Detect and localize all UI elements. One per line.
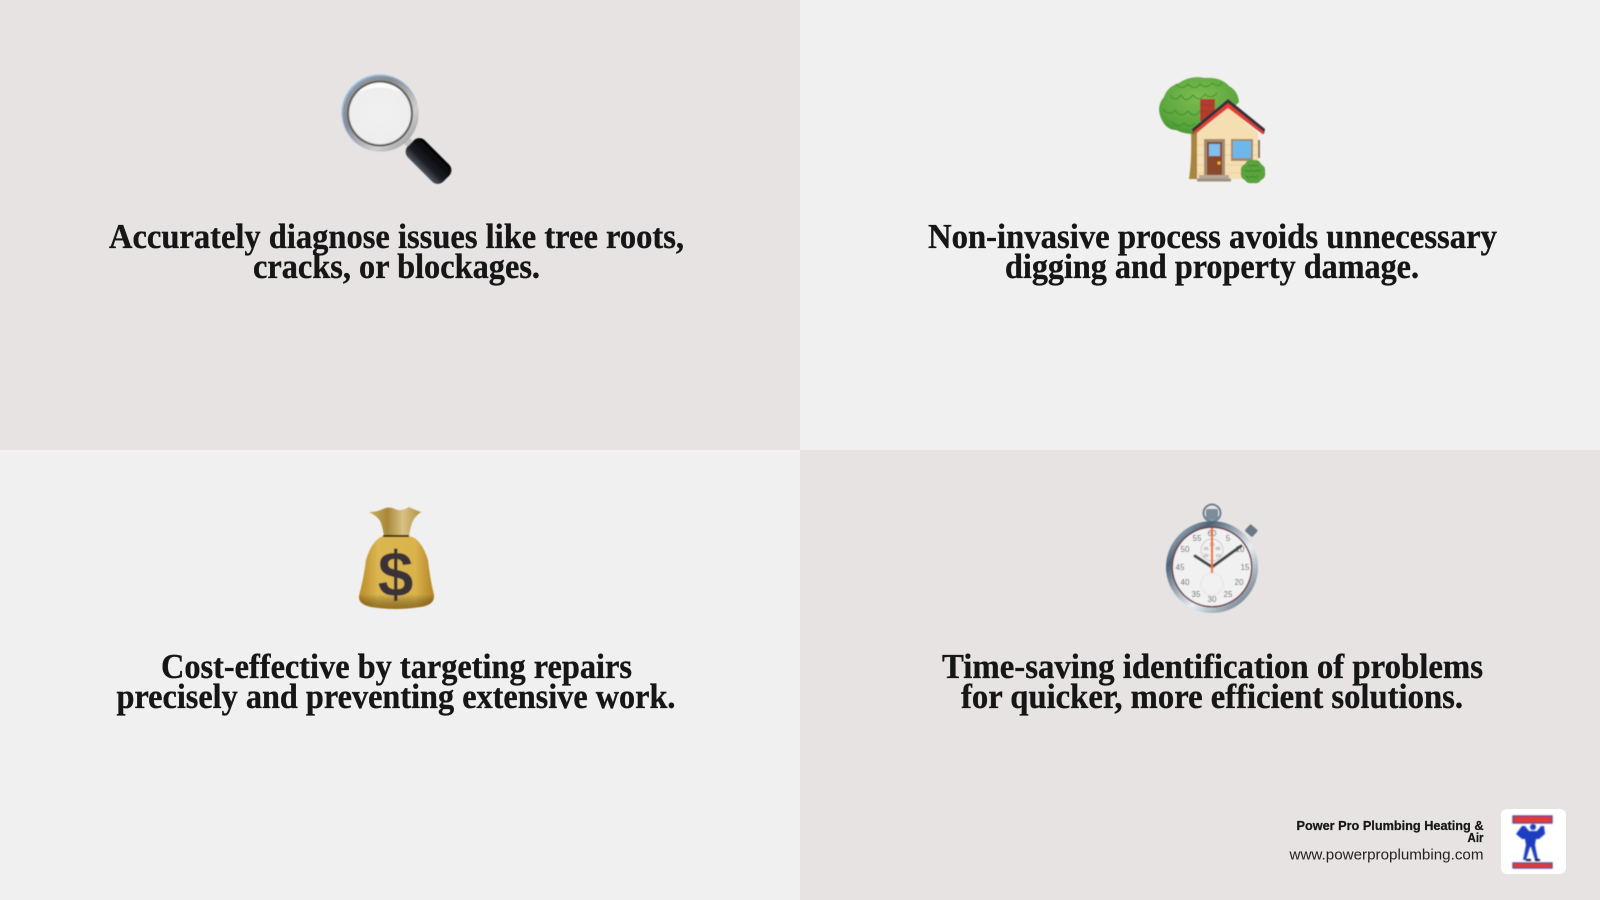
dollar sign: $ bbox=[378, 538, 413, 610]
icon: stopwatch: 10 bbox=[1236, 545, 1245, 554]
heading: diagnose: cracks, or blockages. bbox=[253, 247, 540, 286]
icon: stopwatch: 60 bbox=[1208, 529, 1217, 538]
panel: diagnose background bbox=[0, 0, 800, 450]
heading: time-saving: Time-saving identification of problems bbox=[942, 647, 1483, 686]
footer: company name and website bbox=[1288, 818, 1484, 864]
heading: non-invasive bbox=[928, 217, 1497, 286]
icon: stopwatch: 25 bbox=[1203, 546, 1209, 551]
footer: company name and website: Power Pro Plumbing Heating & bbox=[1296, 818, 1484, 833]
icon: stopwatch: 15 bbox=[1241, 563, 1250, 572]
heading: cost-effective: precisely and preventing extensive work. bbox=[116, 677, 676, 716]
icon: money bag bbox=[359, 507, 434, 610]
footer: company name and website: www.powerproplumbing.com bbox=[1288, 846, 1484, 864]
icon: stopwatch: 20 bbox=[1235, 578, 1244, 587]
icon: stopwatch bbox=[1166, 504, 1258, 613]
heading: time-saving bbox=[942, 647, 1483, 716]
icon: stopwatch: 45 bbox=[1176, 563, 1185, 572]
icon: stopwatch: 35 bbox=[1192, 590, 1201, 599]
panel: cost background bbox=[0, 450, 800, 900]
icon: stopwatch: 05 bbox=[1215, 546, 1221, 551]
icon: stopwatch: 10 bbox=[1215, 553, 1221, 558]
heading: cost-effective: Cost-effective by targeting repairs bbox=[161, 647, 632, 686]
icon: magnifying glass bbox=[342, 74, 455, 187]
footer: company name and website: Air bbox=[1468, 830, 1484, 845]
panel: non-invasive background bbox=[800, 0, 1600, 450]
icon: house with tree bbox=[1159, 77, 1265, 183]
icon: stopwatch: 30 bbox=[1209, 542, 1215, 547]
icon: stopwatch: 50 bbox=[1181, 545, 1190, 554]
icon: stopwatch: 40 bbox=[1181, 578, 1190, 587]
icon: stopwatch: 5 bbox=[1226, 534, 1231, 543]
heading: diagnose: Accurately diagnose issues like tree roots, bbox=[109, 217, 684, 256]
heading: diagnose bbox=[109, 217, 684, 286]
icon: stopwatch: 25 bbox=[1224, 590, 1233, 599]
heading: cost-effective bbox=[116, 647, 676, 716]
heading: non-invasive: Non-invasive process avoids unnecessary bbox=[928, 217, 1497, 256]
icon: stopwatch: 55 bbox=[1193, 534, 1202, 543]
heading: non-invasive: digging and property damage. bbox=[1005, 247, 1419, 286]
logo: strongman holding pipes bbox=[1501, 809, 1566, 874]
panel: time background bbox=[800, 450, 1600, 900]
heading: time-saving: for quicker, more efficient solutions. bbox=[961, 677, 1463, 716]
icon: stopwatch: 30 bbox=[1208, 595, 1217, 604]
icon: stopwatch: 20 bbox=[1203, 553, 1209, 558]
